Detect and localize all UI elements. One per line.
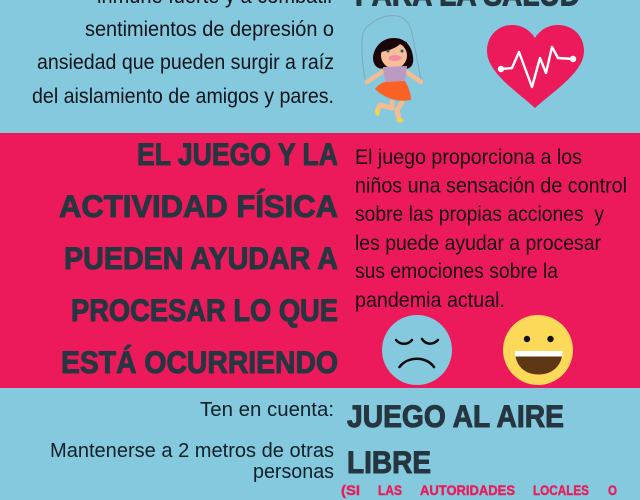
icon: heart with pulse line <box>487 25 584 108</box>
heading: outdoor play: LIBRE <box>347 444 431 480</box>
heading: play and physical activity: PUEDEN AYUDAR A <box>64 240 338 276</box>
panel: bottom blue background <box>0 388 640 500</box>
text block: sense of control: sobre las propias acciones y <box>355 203 604 226</box>
heading: play and physical activity: PROCESAR LO QUE <box>71 292 338 328</box>
heading: play and physical activity: EL JUEGO Y LA <box>137 136 338 172</box>
text block: local authorities note: (SI <box>341 483 360 498</box>
heading: outdoor play: JUEGO AL AIRE <box>347 398 564 434</box>
text block: mental health benefits: sentimientos de depresión o <box>85 18 334 41</box>
text block: sense of control: pandemia actual. <box>355 289 505 312</box>
text block: keep in mind: personas <box>253 461 334 483</box>
text block: mental health benefits: ansiedad que pueden surgir a raíz <box>37 51 334 74</box>
text block: mental health benefits <box>32 0 334 108</box>
icon: sad face <box>382 315 452 385</box>
heading: play and physical activity: ACTIVIDAD FÍSICA <box>59 188 338 224</box>
text block: sense of control: sus emociones sobre la <box>355 260 558 283</box>
heading: outdoor play <box>347 398 564 480</box>
text block: local authorities note <box>341 483 617 498</box>
text block: keep in mind: Ten en cuenta: <box>200 399 334 421</box>
text block: sense of control: niños una sensación de control <box>355 174 627 198</box>
panel: pink middle band <box>0 133 640 388</box>
text block: sense of control: les puede ayudar a procesar <box>355 232 601 255</box>
icon: happy face <box>503 315 573 385</box>
icon: girl jumping rope <box>362 16 421 123</box>
text block: keep in mind <box>50 399 334 483</box>
text block: local authorities note: LOCALES <box>533 483 589 498</box>
text block: local authorities note: LAS <box>378 483 402 498</box>
text block: local authorities note: O <box>608 483 617 498</box>
text block: sense of control: El juego proporciona a los <box>355 146 582 169</box>
text block: local authorities note: AUTORIDADES <box>420 483 515 498</box>
text block: keep in mind: Mantenerse a 2 metros de otras <box>50 440 334 462</box>
heading: play and physical activity <box>59 136 338 380</box>
text block: mental health benefits: del aislamiento de amigos y pares. <box>32 85 334 108</box>
heading: play and physical activity: ESTÁ OCURRIENDO <box>61 344 338 380</box>
panel: top blue background <box>0 0 640 133</box>
text block: sense of control <box>355 146 627 312</box>
